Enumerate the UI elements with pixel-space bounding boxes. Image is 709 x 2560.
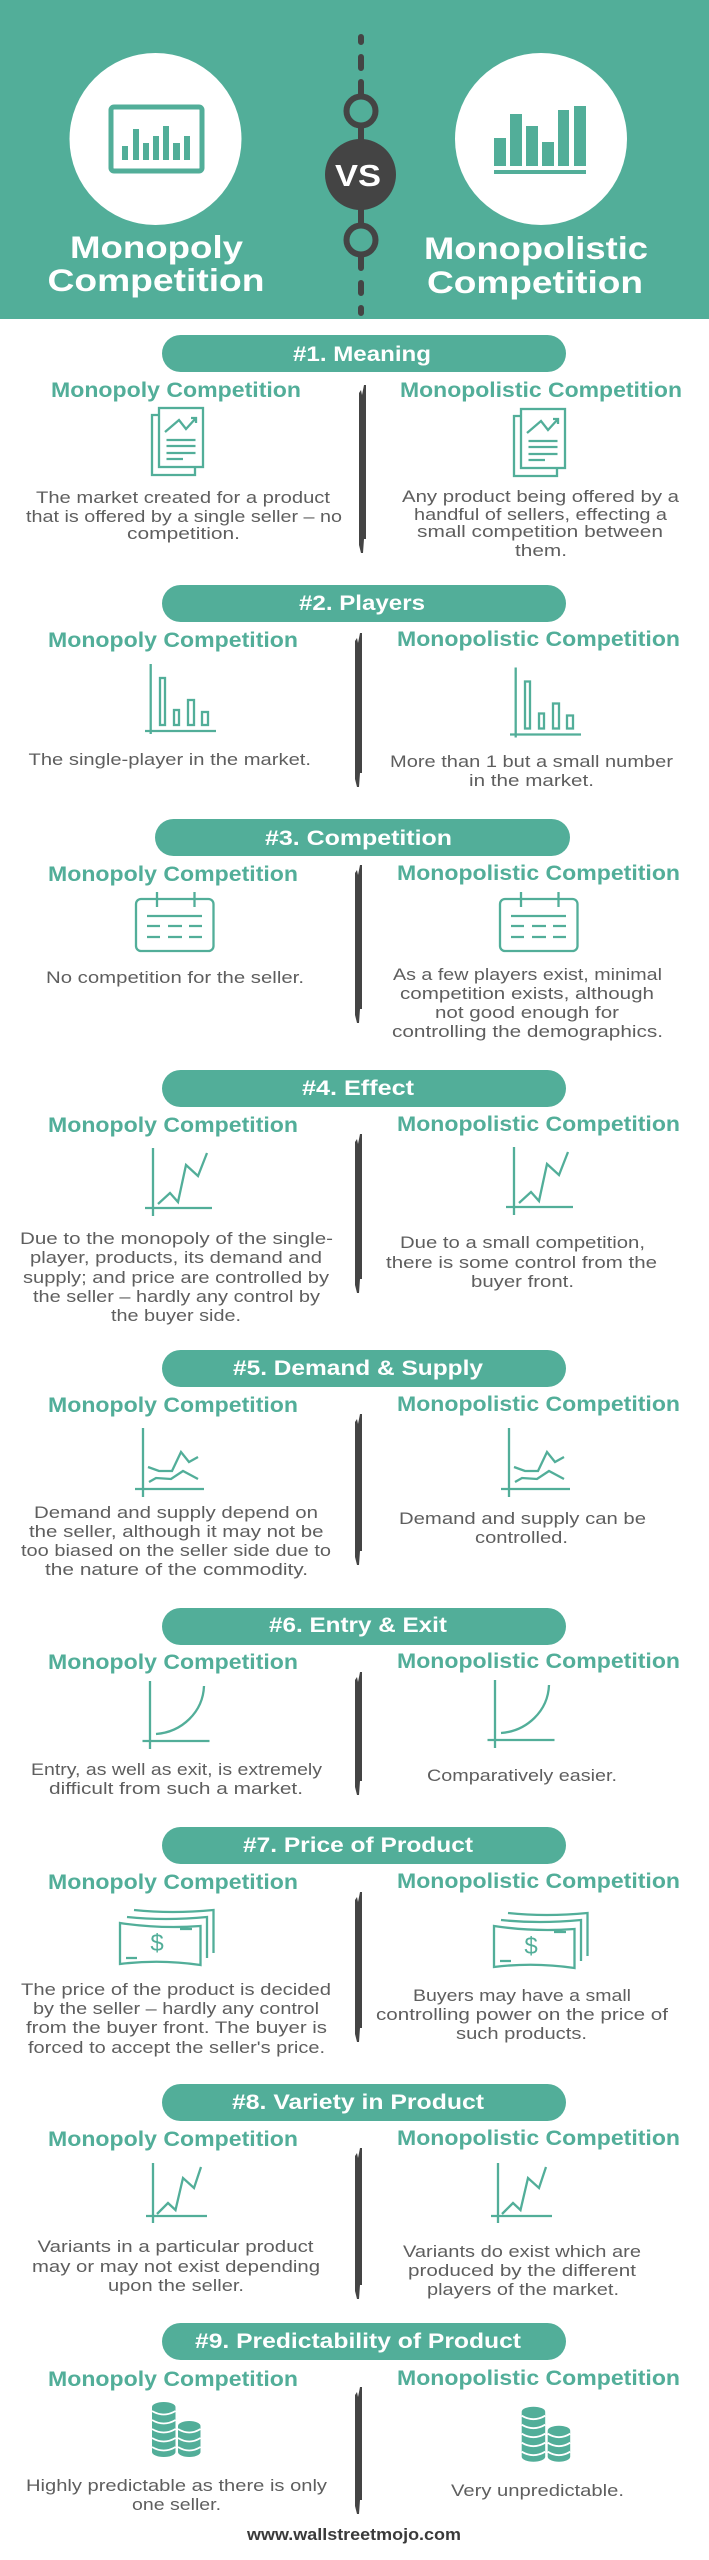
heading pill bbox=[162, 585, 566, 622]
right description: there is some control from the bbox=[386, 1253, 657, 1272]
left column heading: Monopoly Competition bbox=[48, 628, 298, 652]
right description: controlling power on the price of bbox=[376, 2005, 668, 2024]
heading pill: #9. Predictability of Product bbox=[195, 2329, 521, 2353]
column divider bbox=[355, 2148, 362, 2299]
left description bbox=[26, 488, 342, 543]
section 4: Effect bbox=[20, 1070, 680, 1325]
column divider bbox=[355, 633, 362, 787]
right description: in the market. bbox=[469, 771, 594, 790]
right description bbox=[402, 487, 680, 560]
left description: Due to the monopoly of the single- bbox=[20, 1229, 333, 1248]
left description: the nature of the commodity. bbox=[45, 1560, 308, 1579]
left description bbox=[31, 1760, 323, 1798]
right column heading: Monopolistic Competition bbox=[400, 378, 682, 402]
right column heading: Monopolistic Competition bbox=[397, 1869, 680, 1893]
icon: line chart bbox=[506, 1147, 573, 1215]
right column heading: Monopolistic Competition bbox=[397, 2126, 680, 2150]
column divider bbox=[355, 865, 362, 1023]
right description: them. bbox=[515, 541, 567, 560]
right description: controlled. bbox=[475, 1528, 568, 1547]
heading pill: #3. Competition bbox=[265, 826, 452, 850]
icon: growth curve bbox=[488, 1680, 554, 1748]
right description: such products. bbox=[456, 2024, 587, 2043]
right description: Demand and supply can be bbox=[399, 1509, 646, 1528]
heading pill: #5. Demand & Supply bbox=[233, 1356, 483, 1380]
left description: competition. bbox=[127, 524, 240, 543]
heading pill bbox=[162, 1827, 566, 1864]
heading pill bbox=[162, 1070, 566, 1107]
heading pill bbox=[162, 1608, 566, 1645]
icon: banknotes bbox=[494, 1913, 588, 1968]
left description bbox=[32, 2237, 320, 2295]
left description: Demand and supply depend on bbox=[34, 1503, 318, 1522]
right description: competition exists, although bbox=[400, 984, 654, 1003]
VS divider with rings: VS bbox=[335, 158, 381, 193]
right description: More than 1 but a small number bbox=[390, 752, 673, 771]
section 5: Demand and Supply bbox=[21, 1350, 680, 1579]
icon: calendar bbox=[500, 892, 578, 951]
icon: line chart bbox=[145, 1148, 212, 1216]
right title: Monopolistic bbox=[424, 230, 648, 266]
right circle icon: bar chart bbox=[455, 53, 627, 225]
left description: upon the seller. bbox=[108, 2276, 244, 2295]
right column heading: Monopolistic Competition bbox=[397, 1649, 680, 1673]
left description bbox=[26, 2476, 328, 2514]
left column heading: Monopoly Competition bbox=[48, 2127, 298, 2151]
left description: Variants in a particular product bbox=[38, 2237, 314, 2256]
right title second line: Competition bbox=[427, 264, 643, 300]
left column heading: Monopoly Competition bbox=[48, 1870, 298, 1894]
right column heading: Monopolistic Competition bbox=[397, 2366, 680, 2390]
left description bbox=[20, 1229, 333, 1325]
heading pill: #1. Meaning bbox=[293, 342, 431, 366]
column divider bbox=[355, 1414, 362, 1565]
column divider bbox=[355, 1892, 362, 2042]
left description: the seller, although it may not be bbox=[29, 1522, 324, 1541]
icon: line chart bbox=[491, 2163, 552, 2223]
section 1: Meaning bbox=[26, 335, 682, 560]
right column heading: Monopolistic Competition bbox=[397, 1392, 680, 1416]
icon: bar chart bbox=[145, 664, 216, 734]
icon: banknotes: $ bbox=[150, 1930, 164, 1957]
right description: Variants do exist which are bbox=[403, 2242, 641, 2261]
right description: buyer front. bbox=[471, 1272, 574, 1291]
left title: Monopoly bbox=[70, 229, 244, 265]
left description: by the seller – hardly any control bbox=[33, 1999, 319, 2018]
column divider bbox=[355, 1134, 362, 1293]
icon: two-line chart bbox=[501, 1428, 570, 1497]
left column heading: Monopoly Competition bbox=[48, 2367, 298, 2391]
left description: the buyer side. bbox=[111, 1306, 241, 1325]
right description: not good enough for bbox=[435, 1003, 619, 1022]
left column heading: Monopoly Competition bbox=[48, 1393, 298, 1417]
left description: The price of the product is decided bbox=[21, 1980, 331, 1999]
left description: Highly predictable as there is only bbox=[26, 2476, 328, 2495]
right description: Due to a small competition, bbox=[400, 1233, 645, 1252]
heading pill: #2. Players bbox=[299, 591, 425, 615]
section 9: Predictability of Product bbox=[26, 2323, 680, 2514]
right description: controlling the demographics. bbox=[392, 1022, 663, 1041]
left circle icon: bar chart on screen bbox=[70, 53, 242, 225]
right description: Any product being offered by a bbox=[402, 487, 680, 506]
icon: line chart bbox=[146, 2163, 207, 2223]
icon: growth curve bbox=[142, 1681, 210, 1749]
column divider bbox=[359, 385, 366, 553]
right description: Comparatively easier. bbox=[427, 1766, 617, 1785]
left description: one seller. bbox=[132, 2495, 221, 2514]
left description: forced to accept the seller's price. bbox=[28, 2038, 325, 2057]
icon: coin stacks bbox=[522, 2407, 570, 2462]
icon: banknotes: $ bbox=[524, 1933, 538, 1960]
icon: report document bbox=[152, 408, 203, 475]
left description: The market created for a product bbox=[36, 488, 330, 507]
left column heading: Monopoly Competition bbox=[48, 1650, 298, 1674]
icon: calendar bbox=[136, 892, 214, 951]
icon: coin stacks bbox=[152, 2402, 200, 2457]
right description bbox=[376, 1986, 668, 2043]
left description: from the buyer front. The buyer is bbox=[26, 2018, 327, 2037]
heading pill: #8. Variety in Product bbox=[232, 2090, 484, 2114]
heading pill bbox=[162, 1350, 566, 1387]
heading pill: #4. Effect bbox=[302, 1076, 414, 1100]
right description bbox=[386, 1233, 657, 1291]
right description: produced by the different bbox=[408, 2261, 636, 2280]
heading pill: #6. Entry & Exit bbox=[269, 1613, 447, 1637]
heading pill bbox=[162, 2323, 566, 2360]
left description: that is offered by a single seller – no bbox=[26, 507, 342, 526]
section 8: Variety in Product bbox=[32, 2084, 680, 2299]
section 3: Competition bbox=[46, 819, 680, 1041]
icon: two-line chart bbox=[135, 1428, 204, 1497]
heading pill bbox=[162, 2084, 566, 2121]
left title second line: Competition bbox=[48, 262, 264, 298]
right description: As a few players exist, minimal bbox=[393, 965, 662, 984]
heading pill bbox=[162, 335, 566, 372]
left description: too biased on the seller side due to bbox=[21, 1541, 331, 1560]
heading pill: #7. Price of Product bbox=[243, 1833, 473, 1857]
right description: handful of sellers, effecting a bbox=[414, 505, 668, 524]
left description: may or may not exist depending bbox=[32, 2257, 320, 2276]
left description bbox=[21, 1980, 331, 2057]
right description: small competition between bbox=[417, 522, 663, 541]
right description: Very unpredictable. bbox=[451, 2481, 624, 2500]
section 2: Players bbox=[28, 585, 680, 790]
right description: Buyers may have a small bbox=[413, 1986, 631, 2005]
right description bbox=[399, 1509, 646, 1547]
icon: banknotes bbox=[120, 1910, 214, 1965]
VS divider with rings bbox=[325, 37, 396, 313]
left description: No competition for the seller. bbox=[46, 968, 304, 987]
column divider bbox=[355, 2387, 362, 2514]
left description: the seller – hardly any control by bbox=[33, 1287, 321, 1306]
left description: The single-player in the market. bbox=[28, 750, 311, 769]
right column heading: Monopolistic Competition bbox=[397, 627, 680, 651]
left column heading: Monopoly Competition bbox=[48, 1113, 298, 1137]
left description: supply; and price are controlled by bbox=[23, 1268, 330, 1287]
left description: player, products, its demand and bbox=[30, 1248, 322, 1267]
left description: difficult from such a market. bbox=[49, 1779, 303, 1798]
right column heading: Monopolistic Competition bbox=[397, 1112, 680, 1136]
left description bbox=[21, 1503, 331, 1579]
right column heading: Monopolistic Competition bbox=[397, 861, 680, 885]
right description bbox=[390, 752, 673, 790]
right description bbox=[392, 965, 663, 1041]
icon: bar chart bbox=[510, 668, 581, 738]
icon: report document bbox=[514, 409, 565, 476]
left column heading: Monopoly Competition bbox=[48, 862, 298, 886]
right description: players of the market. bbox=[427, 2280, 619, 2299]
column divider bbox=[355, 1672, 362, 1795]
left column heading: Monopoly Competition bbox=[51, 378, 301, 402]
footer source url: www.wallstreetmojo.com bbox=[246, 2526, 461, 2544]
heading pill bbox=[155, 819, 570, 856]
left description: Entry, as well as exit, is extremely bbox=[31, 1760, 323, 1779]
section 7: Price of Product bbox=[21, 1827, 680, 2057]
section 6: Entry and Exit bbox=[31, 1608, 680, 1798]
right description bbox=[403, 2242, 641, 2299]
header banner bbox=[0, 0, 709, 319]
